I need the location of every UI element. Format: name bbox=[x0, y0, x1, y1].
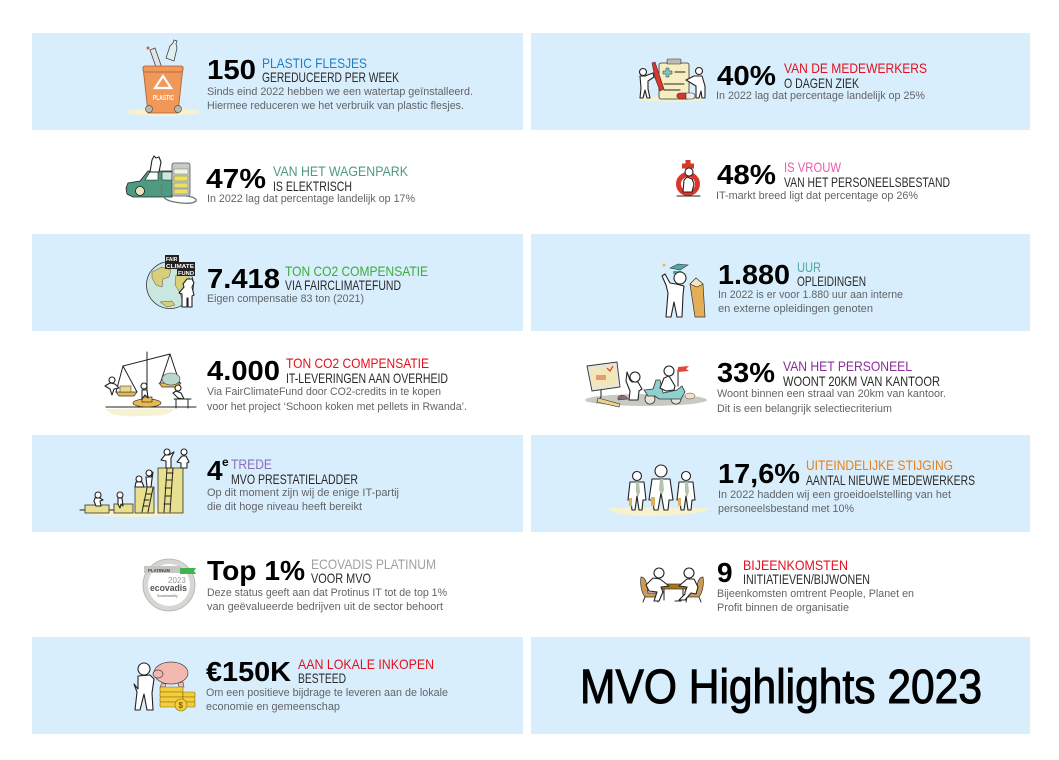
statistic: 4.000: 4.000 bbox=[207, 355, 280, 386]
subheading: MVO PRESTATIELADDER bbox=[231, 471, 358, 487]
heading: is vrouw: IS VROUW bbox=[784, 159, 842, 175]
description: Sinds eind 2022 hebben we een watertap geïnstalleerd. bbox=[207, 86, 473, 98]
description bbox=[207, 386, 467, 413]
panel: training hours bbox=[531, 234, 1030, 331]
icon: recycling bin bbox=[126, 40, 200, 116]
icon: ladder steps with people bbox=[80, 449, 189, 517]
description: personeelsbestand met 10% bbox=[718, 503, 854, 515]
icon: ecovadis platinum medal: ecovadis bbox=[150, 583, 187, 593]
subheading: VAN HET PERSONEELSBESTAND bbox=[784, 174, 950, 190]
subheading: VIA FAIRCLIMATEFUND bbox=[285, 277, 401, 293]
panel: electric fleet bbox=[126, 156, 415, 205]
description bbox=[718, 289, 903, 315]
description: Om een positieve bijdrage te leveren aan de lokale bbox=[206, 687, 448, 699]
statistic: 150: 150 bbox=[207, 54, 256, 85]
icon: three business people bbox=[608, 465, 709, 516]
statistic: 47%: 47% bbox=[206, 163, 266, 194]
description: IT-markt breed ligt dat percentage op 26% bbox=[716, 190, 918, 202]
icon: medical staff with clipboard bbox=[638, 59, 706, 102]
description: economie en gemeenschap bbox=[206, 701, 340, 713]
icon: person with piggy bank and coins bbox=[134, 662, 195, 711]
panel: plastic bottles bbox=[32, 33, 523, 130]
description: voor het project ‘Schoon koken met pellets in Rwanda’. bbox=[207, 401, 467, 413]
heading: van het personeel: VAN HET PERSONEEL bbox=[783, 358, 912, 374]
description bbox=[717, 588, 914, 614]
icon: ecovadis platinum medal: Sustainability bbox=[157, 594, 178, 598]
icon: balance scale bbox=[105, 352, 196, 416]
heading: van het wagenpark: VAN HET WAGENPARK bbox=[273, 163, 409, 179]
statistic: 9: 9 bbox=[717, 557, 733, 588]
panel: CO2 compensation IT deliveries bbox=[105, 352, 467, 416]
icon: ecovadis platinum medal bbox=[143, 559, 196, 611]
panel: meetings bbox=[641, 557, 914, 614]
heading: ton co2 compensatie: TON CO2 COMPENSATIE bbox=[286, 355, 429, 371]
description: Dit is een belangrijk selectiecriterium bbox=[717, 403, 892, 415]
description bbox=[718, 489, 951, 515]
description: Via FairClimateFund door CO2-credits in te kopen bbox=[207, 386, 441, 398]
panel: ecovadis bbox=[143, 555, 447, 613]
panel: sick days bbox=[531, 33, 1030, 130]
icon: globe with fair climate fund logo bbox=[146, 255, 195, 308]
subheading: OPLEIDINGEN bbox=[797, 273, 866, 289]
description: en externe opleidingen genoten bbox=[718, 303, 873, 315]
statistic: 48%: 48% bbox=[717, 159, 776, 190]
heading: uiteindelijke stijging: UITEINDELIJKE STIJGING bbox=[806, 457, 953, 473]
title: MVO Highlights 2023 bbox=[580, 661, 982, 714]
panel: commute bbox=[585, 357, 946, 415]
subheading: WOONT 20KM VAN KANTOOR bbox=[783, 373, 940, 389]
subheading: IS ELEKTRISCH bbox=[273, 178, 352, 194]
heading: ecovadis platinum: ECOVADIS PLATINUM bbox=[311, 556, 436, 572]
panel: local purchasing bbox=[32, 637, 523, 734]
icon: female symbol bbox=[677, 160, 700, 196]
description: Deze status geeft aan dat Protinus IT tot de top 1% bbox=[207, 587, 447, 599]
panel: employee growth bbox=[531, 435, 1030, 532]
description: Profit binnen de organisatie bbox=[717, 602, 849, 614]
description: In 2022 hadden wij een groeidoelstelling van het bbox=[718, 489, 951, 501]
icon: two people at a table bbox=[641, 568, 703, 602]
statistic: 40%: 40% bbox=[717, 60, 776, 91]
description: Eigen compensatie 83 ton (2021) bbox=[207, 293, 364, 305]
icon: monitor, person and scooter bbox=[585, 362, 707, 407]
description: Hiermee reduceren we het verbruik van plastic flesjes. bbox=[207, 100, 464, 112]
icon: globe with fair climate fund logo: FAIR bbox=[166, 257, 178, 263]
description: van geëvalueerde bedrijven uit de sector behoort bbox=[207, 601, 443, 613]
icon: person with piggy bank and coins: $ bbox=[178, 701, 184, 710]
subheading: AANTAL NIEUWE MEDEWERKERS bbox=[806, 472, 975, 488]
panel: CO2 compensation fair climate fund bbox=[32, 234, 523, 331]
description: Op dit moment zijn wij de enige IT-partij bbox=[207, 487, 399, 499]
description: Bijeenkomsten omtrent People, Planet en bbox=[717, 588, 914, 600]
icon: ecovadis platinum medal: PLATINUM bbox=[148, 568, 170, 573]
statistic: 33%: 33% bbox=[717, 357, 775, 388]
heading: bijeenkomsten: BIJEENKOMSTEN bbox=[743, 557, 848, 573]
statistic: 17,6%: 17,6% bbox=[718, 458, 800, 489]
subheading: BESTEED bbox=[298, 670, 346, 686]
description: Woont binnen een straal van 20km van kantoor. bbox=[717, 388, 946, 400]
icon: ecovadis platinum medal: 2023 bbox=[168, 576, 186, 585]
heading: uur: UUR bbox=[797, 259, 821, 275]
panel: women share bbox=[677, 159, 950, 202]
description bbox=[206, 687, 448, 713]
heading: ton co2 compensatie: TON CO2 COMPENSATIE bbox=[285, 263, 428, 279]
heading: plastic flesjes: PLASTIC FLESJES bbox=[262, 55, 367, 71]
statistic: top 1%: Top 1% bbox=[207, 555, 305, 586]
subheading: IT-LEVERINGEN AAN OVERHEID bbox=[286, 370, 448, 386]
statistic: 4e: e bbox=[222, 455, 229, 469]
panel: title bbox=[531, 637, 1030, 734]
statistic: €150K: €150K bbox=[206, 656, 291, 687]
subheading: O DAGEN ZIEK bbox=[784, 75, 859, 91]
icon: electric car bbox=[126, 156, 196, 203]
statistic: 1.880: 1.880 bbox=[718, 259, 790, 290]
subheading: INITIATIEVEN/BIJWONEN bbox=[743, 571, 870, 587]
description bbox=[207, 86, 473, 112]
icon: globe with fair climate fund logo: FUND bbox=[178, 271, 194, 277]
icon: recycling bin: PLASTIC bbox=[153, 95, 174, 102]
description: In 2022 lag dat percentage landelijk op 25% bbox=[716, 90, 925, 102]
description bbox=[207, 587, 447, 613]
icon: graduate with pencil bbox=[662, 264, 705, 317]
description: die dit hoge niveau heeft bereikt bbox=[207, 501, 362, 513]
heading: aan lokale inkopen: AAN LOKALE INKOPEN bbox=[298, 656, 434, 672]
statistic: 7.418: 7.418 bbox=[207, 263, 280, 294]
description bbox=[717, 388, 946, 415]
subheading: VOOR MVO bbox=[311, 570, 371, 586]
description: In 2022 is er voor 1.880 uur aan interne bbox=[718, 289, 903, 301]
icon: globe with fair climate fund logo: CLIMATE bbox=[166, 264, 195, 270]
subheading: GEREDUCEERD PER WEEK bbox=[262, 69, 399, 85]
panel: MVO prestatieladder bbox=[32, 435, 523, 532]
heading: trede: TREDE bbox=[231, 456, 272, 472]
heading: van de medewerkers: VAN DE MEDEWERKERS bbox=[784, 60, 927, 76]
description: In 2022 lag dat percentage landelijk op 17% bbox=[207, 193, 415, 205]
statistic: 4e: 4 bbox=[207, 455, 223, 486]
description bbox=[207, 487, 399, 513]
